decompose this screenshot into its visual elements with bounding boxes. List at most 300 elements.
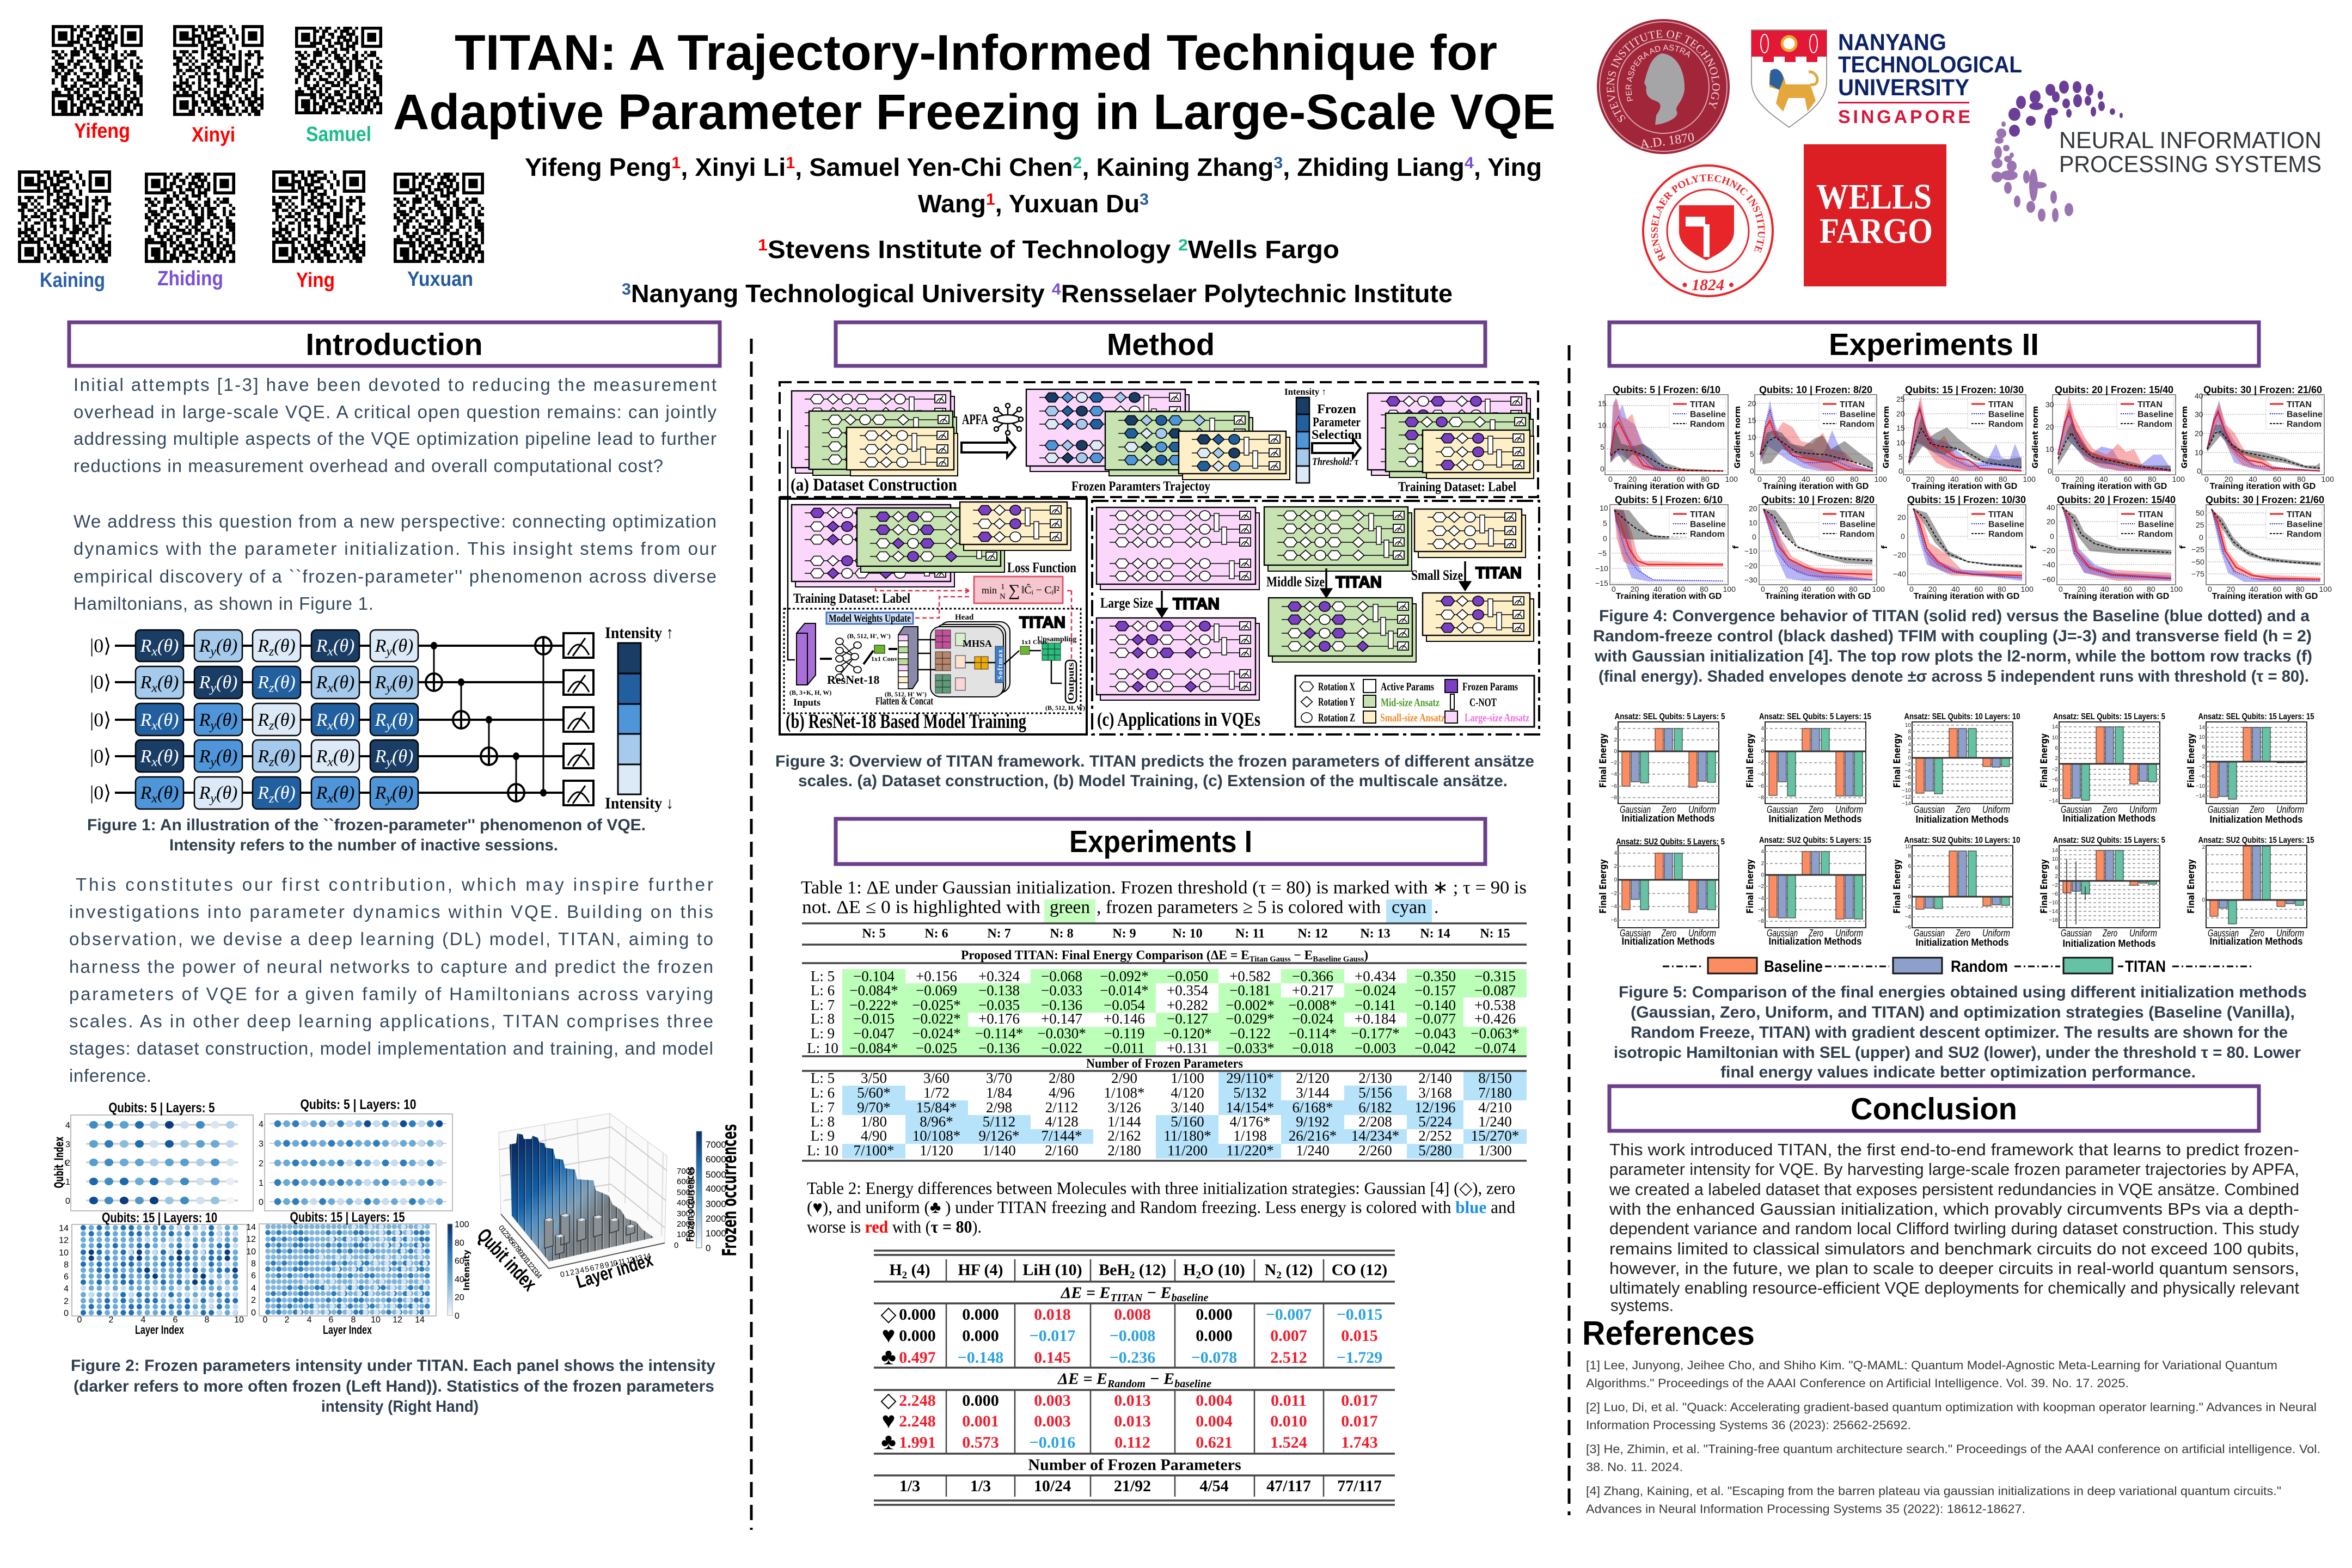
plot: final energy qubits 15: 20 <box>1897 513 1906 522</box>
table 1 energy rows: +0.282 <box>1167 997 1208 1013</box>
3D chart axis labels: 3000 <box>677 1209 695 1218</box>
QR code: Yuxuan <box>365 173 484 291</box>
table 1 frozen parameter rows: 2/120 <box>1296 1070 1330 1086</box>
table 1 frozen parameter rows: 2/252 <box>1418 1128 1452 1144</box>
gate labels: (θ) <box>274 746 296 767</box>
table 2 Random rows: 0.017 <box>1341 1392 1378 1410</box>
intensity colour bar <box>605 624 673 812</box>
bar plot: SU2 qubits 10 layers 10: 10 <box>1905 844 1911 850</box>
table 1 frozen parameter rows: 1/300 <box>1478 1142 1512 1159</box>
text block: introduction paragraph 3 <box>69 874 713 1086</box>
bar plot: SU2 qubits 5 layers 5: −6 <box>1611 917 1617 923</box>
initial state labels: |0⟩ <box>90 709 111 731</box>
plot: gradient norm qubits 5: Training iteration with GD <box>1614 482 1719 491</box>
table 2 section headings <box>1028 1284 1241 1474</box>
bar plot: SU2 qubits 15 layers 5: 2 <box>2055 874 2058 880</box>
QR code: Yifeng <box>23 25 143 143</box>
bar plot: SEL qubits 10 layers 10: −14 <box>1902 801 1911 807</box>
bar plot: SU2 qubits 5 layers 5: −2 <box>1611 891 1617 897</box>
initial state labels: |0⟩ <box>90 745 111 767</box>
plot: gradient norm qubits 30: TITAN <box>2287 400 2312 409</box>
table 2 header: HF (4) <box>958 1261 1003 1279</box>
table 1 energy rows: −0.092* <box>1100 968 1149 984</box>
dot panel: qubits 5 layers 10: 1 <box>259 1179 264 1188</box>
logo: Rensselaer Polytechnic Institute seal: • 1824 • <box>1682 276 1734 294</box>
plot: gradient norm qubits 30: 10 <box>2195 448 2203 457</box>
plot: final energy qubits 30: 0 20 40 60 80 100 <box>2208 585 2332 593</box>
gate labels: R <box>375 746 386 767</box>
table 2 TITAN rows: −0.015 <box>1337 1306 1382 1324</box>
table 1 energy rows: −0.025 <box>916 1040 957 1056</box>
table 1 energy rows: L: 7 <box>811 997 835 1013</box>
figure 2 caption: Figure 2: Frozen parameters intensity under TITAN. Each panel shows the intensity <box>71 1357 715 1375</box>
plot: final energy qubits 15: 0 <box>1901 532 1905 541</box>
table 1 frozen parameter rows: 29/110* <box>1226 1070 1274 1086</box>
plot: gradient norm qubits 30: 20 <box>2195 429 2203 438</box>
bar plot: SEL qubits 5 layers 15: −6 <box>1758 783 1764 789</box>
table 1 frozen parameter rows: 1/80 <box>861 1113 887 1130</box>
table 1 energy rows: +0.146 <box>1104 1010 1145 1027</box>
figure 5 caption <box>1614 983 2307 1081</box>
dot panel: qubits 15 layers 10: 0 <box>64 1309 69 1318</box>
figure 5 caption: Random Freeze, TITAN) with gradient descent optimizer. The results are shown for the <box>1631 1024 2288 1042</box>
bar plot: SEL qubits 15 layers 15: Uniform <box>2276 804 2304 815</box>
bar plot: SEL qubits 15 layers 5: −2 <box>2052 767 2058 773</box>
plot: gradient norm qubits 10: 5 <box>1750 450 1754 458</box>
bar plot: SEL qubits 15 layers 5: Ansatz: SEL Qubits: 15 Layers: 5 <box>2053 712 2165 721</box>
table 1 frozen parameter rows: 9/192 <box>1296 1113 1330 1130</box>
figure 5 caption: isotropic Hamiltonian with SEL (upper) and SU2 (lower), under the threshold τ = 80. Lower <box>1614 1044 2301 1062</box>
bar plot: SEL qubits 5 layers 15: 2 <box>1761 737 1764 743</box>
logo: Stevens Institute of Technology seal: A.D. 1870 <box>1639 130 1695 152</box>
3D chart axis labels: 5000 <box>677 1188 695 1197</box>
plot: gradient norm qubits 10 <box>1734 384 1887 491</box>
dot plot colour bar: 60 <box>455 1257 464 1266</box>
figure 5: final energy bar charts <box>1598 712 2314 976</box>
table 2 header: 2 <box>1276 1270 1282 1281</box>
table 1 frozen parameter rows: 3/50 <box>861 1070 887 1086</box>
bar plot: SEL qubits 15 layers 5: Initialization Methods <box>2062 813 2156 824</box>
logo: Neural Information Processing Systems <box>1992 81 2322 222</box>
model architecture: Softmax <box>996 649 1004 679</box>
plot: gradient norm qubits 15: 5 <box>1898 452 1903 461</box>
bar plot: SEL qubits 15 layers 15: 10 <box>2199 734 2205 740</box>
bar plot: SEL qubits 15 layers 5: Zero <box>2102 804 2117 815</box>
plot: final energy qubits 10: f <box>1732 545 1741 549</box>
table 1 frozen parameter rows: 2/140 <box>1418 1070 1452 1086</box>
heading: Experiments II <box>1609 322 2259 366</box>
table 1 energy rows: −0.018 <box>1292 1040 1333 1056</box>
QR codes with author names <box>0 25 484 292</box>
table 1 header: N: 11 <box>1235 927 1265 941</box>
gate labels: (θ) <box>333 746 354 767</box>
table 2 Random rows: 0.017 <box>1341 1412 1378 1430</box>
dot panel: qubits 5 layers 5: Qubit_Index <box>53 1137 66 1188</box>
bar plot: SU2 qubits 10 layers 10: Gaussian <box>1914 928 1945 939</box>
table 1 frozen parameter rows <box>807 1070 1519 1159</box>
plot: gradient norm qubits 20: Gradient norm <box>2031 406 2040 468</box>
plot: final energy qubits 5: 0 <box>1603 534 1607 543</box>
figure 3 legend: Mid-size Ansatz <box>1381 696 1440 709</box>
bar plot: SEL qubits 10 layers 10: 10 <box>1905 722 1911 728</box>
table 1 frozen parameter rows: 2/112 <box>1045 1099 1078 1116</box>
table 2 header: 2 <box>1196 1270 1201 1281</box>
logo: Wells Fargo <box>1804 144 1946 286</box>
table 1 frozen parameter rows: 1/84 <box>986 1085 1012 1101</box>
plot: gradient norm qubits 5: 0 20 40 60 80 100 <box>1608 475 1738 483</box>
plot: gradient norm qubits 30: 30 <box>2195 410 2203 419</box>
intensity colour bar: Intensity ↓ <box>605 794 673 812</box>
heading: Introduction: Introduction <box>306 327 482 362</box>
bar plot: SU2 qubits 5 layers 5: Gaussian <box>1620 928 1651 939</box>
TITAN size labels: TITAN <box>1475 564 1522 582</box>
loss function box: Loss Function <box>1007 560 1076 575</box>
table 1 energy rows: −0.120* <box>1163 1025 1212 1042</box>
panel: experiments II <box>1582 322 2334 1516</box>
plot: gradient norm qubits 15: 15 <box>1896 424 1905 432</box>
plot: final energy qubits 10: 10 <box>1749 518 1757 527</box>
table 1 energy rows: −0.022 <box>1041 1040 1082 1056</box>
table 1 frozen parameter rows: 2/90 <box>1111 1070 1137 1086</box>
dot panel: qubits 15 layers 15: 12 <box>246 1235 256 1244</box>
table 2 section headings: baseline <box>1174 1378 1211 1390</box>
table 1 frozen parameter rows: 1/240 <box>1478 1113 1512 1130</box>
dot panel: qubits 15 layers 15: 8 <box>251 1259 256 1269</box>
table 1 frozen parameter rows: 8/96* <box>920 1113 953 1130</box>
TITAN size labels: Small Size <box>1411 567 1463 583</box>
table 1 frozen parameter rows: L: 8 <box>811 1113 835 1130</box>
table 1 header: N: 14 <box>1420 927 1450 941</box>
table 2 TITAN rows: 0.015 <box>1341 1327 1378 1345</box>
bar plot: SEL qubits 15 layers 15: −2 <box>2199 764 2205 770</box>
text block: references: Information Processing Systems 36 (2023): 25662-25692. <box>1586 1418 1911 1432</box>
plot: gradient norm qubits 30: Qubits: 30 | Frozen: 21/60 <box>2203 384 2322 395</box>
CNOT gates <box>426 637 552 801</box>
plot: gradient norm qubits 30: 0 <box>2197 467 2201 475</box>
plot: final energy qubits 15: −20 <box>1893 550 1906 559</box>
3D chart axis labels <box>473 1167 695 1295</box>
intensity bar and selection <box>1284 387 1362 483</box>
bar plot: SEL qubits 15 layers 15: Ansatz: SEL Qubits: 15 Layers: 15 <box>2198 712 2314 721</box>
table 1 energy rows <box>807 968 1520 1056</box>
loss function box: 1 <box>1001 583 1005 591</box>
table 1 frozen parameter rows: 1/120 <box>920 1142 953 1159</box>
table 2 Random rows <box>880 1389 1378 1455</box>
gate labels: (θ) <box>392 672 413 693</box>
gate labels: z <box>268 645 274 659</box>
table 1 frozen parameter rows: 5/280 <box>1418 1142 1452 1159</box>
table 2 TITAN rows: 0.145 <box>1034 1349 1071 1367</box>
plot: final energy qubits 10 <box>1732 494 1885 601</box>
table 1 frozen parameter rows: 11/180* <box>1163 1128 1211 1144</box>
3D chart axis labels: 4000 <box>677 1198 695 1208</box>
3D chart colour bar: 6000 <box>706 1154 726 1165</box>
table 1 frozen parameter rows: 4/96 <box>1049 1085 1075 1101</box>
table 1 frozen parameter rows: 7/144* <box>1041 1128 1082 1144</box>
dot plot colour bar: 20 <box>455 1293 464 1302</box>
bar plot: SEL qubits 15 layers 5: −10 <box>2049 787 2058 793</box>
table 2 Random rows: 0.013 <box>1114 1392 1151 1410</box>
bar plot: SU2 qubits 15 layers 5: 10 <box>2052 856 2058 862</box>
dot panel: qubits 15 layers 15 <box>246 1210 436 1337</box>
figure 5 caption: Figure 5: Comparison of the final energies obtained using different initialization methods <box>1619 983 2307 1001</box>
logo: Stevens Institute of Technology seal: PER ASPERA AD ASTRA <box>1626 45 1690 101</box>
table 1 frozen parameter rows: 1/72 <box>923 1085 950 1101</box>
dot panel: qubits 15 layers 15: 6 <box>251 1271 256 1281</box>
plot: final energy qubits 10: TITAN <box>1840 510 1865 519</box>
hollow arrow: APFA <box>961 412 1015 457</box>
table 2 Random rows: 0.013 <box>1114 1412 1151 1430</box>
text block: conclusion: with the enhanced Gaussian initialization, which provably circumvents BPs via a depth- <box>1609 1199 2299 1218</box>
plot: gradient norm qubits 20: 20 <box>2045 422 2054 431</box>
authors and affiliations: Wang <box>918 189 985 218</box>
bar plot: SU2 qubits 5 layers 15: −2 <box>1758 884 1764 890</box>
table 1 energy rows: −0.087 <box>1474 982 1516 999</box>
table 1 frozen parameter rows: 5/224 <box>1418 1113 1452 1130</box>
3D chart colour bar <box>696 1124 741 1257</box>
gate labels: x <box>151 645 157 659</box>
bar plot: SEL qubits 5 layers 5: 2 <box>1614 737 1617 743</box>
model architecture: (B, 3+K, H, W) <box>789 689 831 696</box>
bar plot: SU2 qubits 10 layers 10 <box>1892 836 2020 948</box>
bar plot: SU2 qubits 5 layers 15: 0 <box>1761 872 1764 878</box>
gate labels: R <box>258 746 269 767</box>
table 2 TITAN rows: −0.236 <box>1110 1349 1155 1367</box>
QR code: Kaining <box>0 170 111 292</box>
dot panel: qubits 15 layers 15: 4 <box>307 1315 312 1325</box>
table 2 TITAN rows: 0.000 <box>899 1327 936 1345</box>
authors and affiliations: , Samuel Yen-Chi Chen <box>795 153 1073 181</box>
bar plot: SEL qubits 15 layers 5: 2 <box>2055 756 2058 762</box>
dot panel: qubits 15 layers 10 <box>59 1210 247 1337</box>
table 1 energy rows: −0.315 <box>1474 968 1516 984</box>
figure 3 legend: Rotation X <box>1318 680 1355 693</box>
bar plot: SU2 qubits 15 layers 15 <box>2186 836 2314 947</box>
plot: final energy qubits 10: Training iteration with GD <box>1765 592 1871 601</box>
model architecture: 1x1 Conv <box>871 655 897 663</box>
table 2 header: 2 <box>902 1270 907 1281</box>
bar plot: SEL qubits 10 layers 10 <box>1892 712 2020 825</box>
bar plot: SU2 qubits 15 layers 5: −18 <box>2049 917 2058 923</box>
table 2 Random rows: 0.004 <box>1196 1412 1233 1430</box>
sub-panel: model training: (b) ResNet-18 Based Model Training <box>786 710 1026 733</box>
table 1 energy rows: −0.136 <box>1041 997 1082 1013</box>
heading: Conclusion: Conclusion <box>1851 1092 2017 1126</box>
table 1 frozen parameter rows: 2/260 <box>1358 1142 1392 1159</box>
bar plot: SEL qubits 5 layers 15: Zero <box>1808 804 1823 815</box>
table 2 header: (12) <box>1282 1261 1313 1279</box>
authors and affiliations: 4 <box>1465 154 1474 172</box>
table 1 caption: cyan <box>1392 897 1426 917</box>
table 1 header: Titan Gauss <box>1250 955 1291 964</box>
model architecture: Upsampling <box>1037 635 1076 644</box>
text block: introduction paragraph 3: observation, we devise a deep learning (DL) model, TITAN, aiming to <box>69 929 713 949</box>
gate labels: (θ) <box>274 710 296 730</box>
table 1 caption: , frozen parameters ≥ 5 is colored with <box>1097 897 1381 917</box>
gate labels: R <box>316 672 327 693</box>
table 1 frozen parameter rows: 7/180 <box>1478 1085 1512 1101</box>
model architecture: Head <box>955 613 974 622</box>
dot panel: qubits 15 layers 15: 0 <box>263 1315 268 1325</box>
gate labels: R <box>375 710 386 730</box>
table 2 frozen row: 77/117 <box>1337 1477 1382 1495</box>
table 2 frozen row: 1/3 <box>970 1477 991 1495</box>
plot: final energy qubits 20: −40 <box>2042 560 2055 569</box>
authors and affiliations: 3 <box>1273 154 1283 172</box>
plot: final energy qubits 15 <box>1881 494 2033 601</box>
plot: final energy qubits 10: Random <box>1840 530 1875 539</box>
table 1 energy rows: −0.024 <box>1355 982 1396 999</box>
table 1 energy rows: −0.127 <box>1167 1010 1208 1027</box>
plot: gradient norm qubits 10: Qubits: 10 | Frozen: 8/20 <box>1759 384 1872 395</box>
QR code: Ying <box>243 170 365 292</box>
gate labels: R <box>140 710 151 730</box>
text block: introduction paragraph 3: inference. <box>69 1065 151 1086</box>
QR code: Samuel: Samuel <box>306 123 371 146</box>
gate labels: y <box>209 681 216 695</box>
bar plot: SEL qubits 5 layers 5 <box>1598 712 1725 824</box>
bar plot: SU2 qubits 10 layers 10: Uniform <box>1982 928 2010 939</box>
gate labels: R <box>375 672 386 693</box>
logo: Rensselaer Polytechnic Institute seal: RENSSELAER POLYTECHNIC INSTITUTE <box>1651 174 1765 262</box>
heading: Experiments I <box>836 819 1485 864</box>
bar plot: SU2 qubits 15 layers 5: −6 <box>2052 891 2058 897</box>
model architecture: (B, 512, H', W') <box>847 632 891 640</box>
bar plot: SU2 qubits 15 layers 5: −14 <box>2049 909 2058 915</box>
bar plot: SEL qubits 15 layers 15: Initialization Methods <box>2209 814 2303 825</box>
authors and affiliations: Yifeng Peng <box>525 153 669 181</box>
bar plot: SU2 qubits 5 layers 15: 4 <box>1761 849 1764 855</box>
table 1 energy rows: −0.003 <box>1355 1040 1396 1056</box>
3D chart axis labels: 1000 <box>677 1230 695 1239</box>
plot: final energy qubits 10: −30 <box>1744 575 1757 584</box>
dot panel: qubits 15 layers 10: 10 <box>59 1248 69 1258</box>
table 1 energy rows: −0.222* <box>849 997 898 1013</box>
bar plot: SEL qubits 15 layers 15: −6 <box>2199 774 2205 780</box>
text block: conclusion: ultimately enabling resource-efficient VQE deployments for chemically and physically relevant <box>1609 1278 2299 1297</box>
table 1 energy rows: −0.114* <box>975 1025 1023 1042</box>
table 1 frozen parameter rows: 5/132 <box>1233 1085 1267 1101</box>
plot: gradient norm qubits 5: Baseline <box>1690 410 1726 419</box>
dot panel: qubits 15 layers 15: 10 <box>246 1247 256 1257</box>
3D chart axis labels: 2000 <box>677 1220 695 1229</box>
bar plot: SU2 qubits 10 layers 10: 8 <box>1908 853 1911 859</box>
bar plot: SEL qubits 5 layers 15: Initialization Methods <box>1768 813 1862 824</box>
gate labels: R <box>316 710 327 730</box>
plot: final energy qubits 10: 0 20 40 60 80 100 <box>1761 585 1885 593</box>
table 1 frozen parameter rows: 11/220* <box>1226 1142 1274 1159</box>
table 2 TITAN rows: 0.007 <box>1270 1327 1307 1345</box>
gate labels: R <box>199 636 210 656</box>
gate labels: (θ) <box>216 746 237 767</box>
bar plot: SU2 qubits 15 layers 5: 6 <box>2055 865 2058 871</box>
dot panel: qubits 5 layers 5: 3 <box>65 1140 70 1149</box>
bar plot: SEL qubits 10 layers 10: Gaussian <box>1914 804 1945 815</box>
text block: introduction paragraph 1: reductions in measurement overhead and overall computational cost? <box>74 456 663 476</box>
dot plot colour bar: 0 <box>455 1312 460 1321</box>
icon: network <box>993 403 1023 435</box>
table 1 caption: green <box>1050 897 1090 917</box>
plot: final energy qubits 15: Baseline <box>1988 520 2024 529</box>
plot: gradient norm qubits 15: 25 <box>1896 395 1905 403</box>
table 1 energy rows: L: 8 <box>811 1010 835 1027</box>
table 1 energy rows: −0.035 <box>978 997 1020 1013</box>
bar chart legend: TITAN <box>2125 958 2166 976</box>
plot: gradient norm qubits 15: Gradient norm <box>1882 406 1891 468</box>
sub-panel labels: Frozen Paramters Trajectoy <box>1071 479 1210 494</box>
sub-panel: dataset construction <box>780 382 1538 497</box>
table 2 header: (12) <box>1135 1261 1166 1279</box>
table 1 energy rows: −0.022* <box>912 1010 961 1027</box>
gate labels: y <box>385 755 392 769</box>
plot: final energy qubits 5: Training iteration with GD <box>1616 592 1722 601</box>
gate labels: R <box>199 746 210 767</box>
QR code: Samuel <box>268 27 382 146</box>
bar plot: SU2 qubits 10 layers 10: Final Energy <box>1892 859 1903 914</box>
table 2 section headings: ΔE = E <box>1061 1284 1111 1302</box>
text block: conclusion: dependent variance and random local Clifford twirling during dataset construction. This study <box>1609 1219 2299 1238</box>
table 2 header: H <box>1183 1261 1196 1279</box>
bar plot: SU2 qubits 10 layers 10: −2 <box>1905 904 1911 910</box>
3D chart colour bar: 0 <box>706 1243 710 1253</box>
table 2 section headings: − E <box>1146 1370 1174 1388</box>
gate labels: y <box>209 719 216 733</box>
table 2 TITAN rows: −0.078 <box>1191 1349 1237 1367</box>
figure 3: TITAN framework <box>780 382 1539 734</box>
table 2 TITAN rows: 0.000 <box>1196 1306 1233 1324</box>
table 1 frozen parameter rows: 2/80 <box>1049 1070 1075 1086</box>
model architecture <box>784 609 1085 713</box>
table 1 energy rows: −0.141 <box>1355 997 1396 1013</box>
model architecture: Inputs <box>793 697 820 708</box>
text block: conclusion: This work introduced TITAN, the first end-to-end framework that learns to predict frozen- <box>1609 1140 2299 1159</box>
table 1 energy rows: −0.024 <box>1292 1010 1333 1027</box>
table 1 frozen parameter rows: 12/196 <box>1414 1099 1456 1116</box>
plot: gradient norm qubits 15: 0 <box>1898 467 1903 475</box>
plot: final energy qubits 30: Qubits: 30 | Frozen: 21/60 <box>2206 494 2324 505</box>
gate labels: R <box>258 710 269 730</box>
gate labels: R <box>316 636 327 656</box>
table 1 frozen parameter rows: 3/144 <box>1296 1085 1330 1101</box>
bar plot: SEL qubits 15 layers 5: −14 <box>2049 798 2058 804</box>
table 2 header: 2 <box>1130 1270 1135 1281</box>
bar plot: SU2 qubits 15 layers 15: Uniform <box>2276 928 2304 939</box>
table 1 energy rows: −0.119 <box>1104 1025 1144 1042</box>
table 1 energy rows: +0.426 <box>1474 1010 1516 1027</box>
table 2 caption: worse is red with (τ = 80). <box>807 1217 982 1236</box>
table 1 frozen parameter rows: 4/210 <box>1478 1099 1512 1116</box>
bar plot: SEL qubits 10 layers 10: Ansatz: SEL Qubits: 10 Layers: 10 <box>1904 712 2020 721</box>
table 1 frozen parameter rows: 3/126 <box>1107 1099 1141 1116</box>
dot panel: qubits 5 layers 5 <box>53 1100 253 1211</box>
gate labels: R <box>199 672 210 693</box>
bar plot: SEL qubits 10 layers 10: Final Energy <box>1892 733 1903 788</box>
model architecture: Outputs <box>1067 663 1076 701</box>
table 1 frozen parameter rows: L: 10 <box>807 1142 838 1159</box>
dot panel: qubits 15 layers 10: 4 <box>64 1284 69 1294</box>
bar plot: SU2 qubits 15 layers 15: Zero <box>2249 928 2264 939</box>
gate labels: (θ) <box>333 783 354 803</box>
table 1 frozen parameter rows: 26/216* <box>1289 1128 1337 1144</box>
figure 5 caption: final energy values indicate better optimization performance. <box>1720 1063 2196 1081</box>
logo: Nanyang Technological University: UNIVERSITY <box>1838 75 1969 101</box>
figure 1 caption: Intensity refers to the number of inactive sessions. <box>169 836 558 854</box>
intensity bar and selection: Frozen <box>1317 402 1356 416</box>
gate labels: R <box>258 636 269 656</box>
text block: references <box>1586 1358 2320 1516</box>
table 2 TITAN rows: 0.497 <box>899 1349 936 1367</box>
table 1 frozen parameter rows: 6/182 <box>1358 1099 1392 1116</box>
